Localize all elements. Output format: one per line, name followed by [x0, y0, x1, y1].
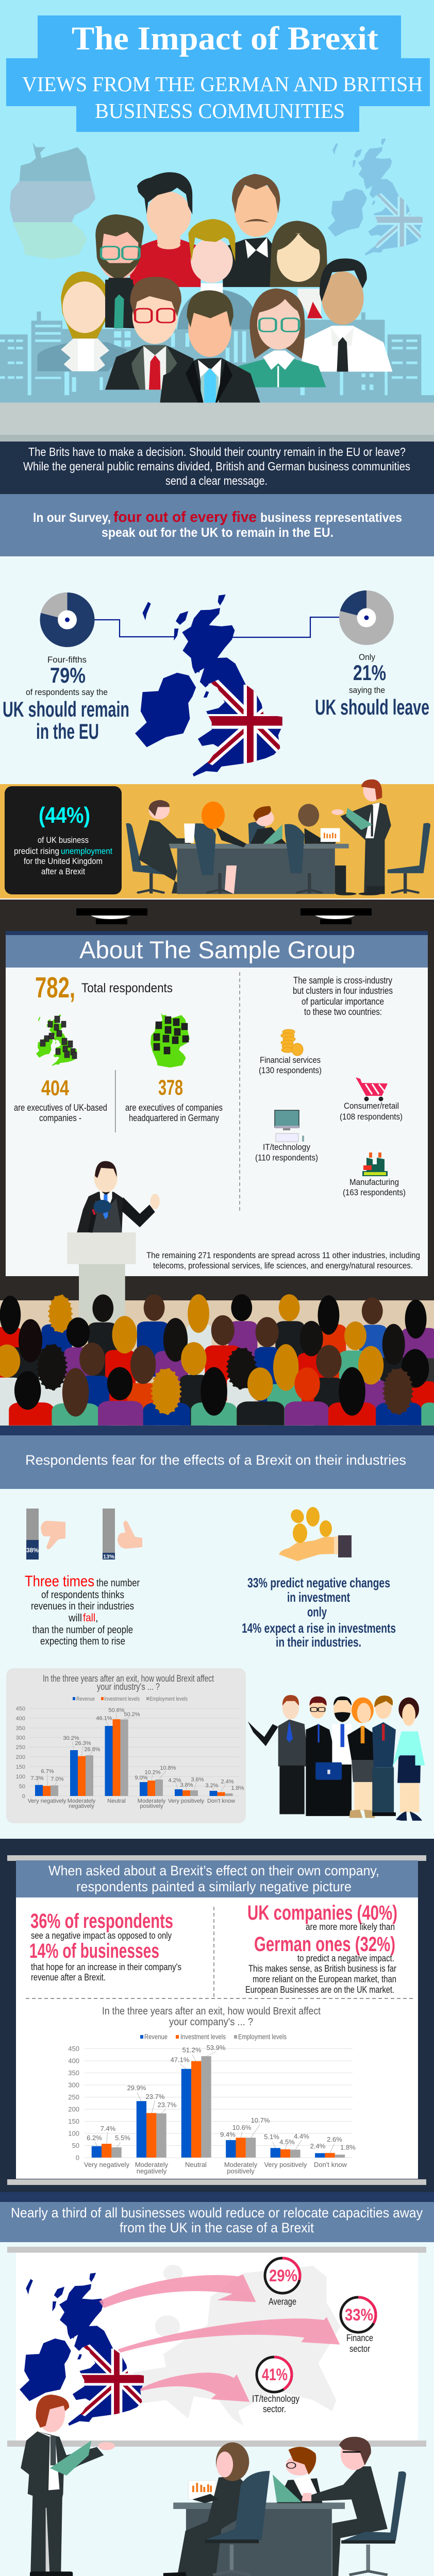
- total respondents: [35, 971, 173, 1004]
- connector lines from donuts to map: [67, 617, 366, 637]
- remaining respondents note: [146, 1250, 420, 1270]
- seated man curly hair: [273, 2447, 323, 2503]
- label: IT technology: (110 respondents): [255, 1153, 318, 1162]
- heading: nearly a third: from the UK in the case of a Brexit: [120, 2220, 314, 2235]
- callout: 44 percent unemployment: [5, 786, 122, 894]
- callout: 44 percent unemployment: unemployment: [61, 846, 112, 856]
- category labels: positively: [227, 2167, 255, 2175]
- data labels: 1.8%: [340, 2143, 356, 2151]
- icon: thumbs up: [118, 1521, 142, 1549]
- data labels: 4.5%: [279, 2138, 295, 2146]
- category labels: negatively: [69, 1803, 94, 1809]
- data labels: 46.1%: [96, 1716, 112, 1722]
- axis values: 100: [16, 1774, 25, 1780]
- axis values: 200: [68, 2105, 79, 2113]
- text: three times: revenues in their industries: [31, 1601, 134, 1612]
- seated woman orange hair: [202, 802, 246, 894]
- leave statistic text: Only: [359, 652, 375, 662]
- data labels: 3.6%: [191, 1776, 204, 1783]
- audience: [0, 1294, 434, 1426]
- chart title: [43, 1673, 214, 1692]
- Germany respondent count: headquartered in Germany: [129, 1113, 219, 1123]
- header illustration: maps, skyline and business people: [0, 140, 434, 402]
- ring: 33 percent finance: [341, 2297, 376, 2354]
- seated man left: [138, 800, 195, 893]
- bar: 13 percent revenue rise: 13%: [103, 1554, 114, 1560]
- bars: [35, 1726, 218, 1796]
- label: financial services: Financial services: [260, 1055, 321, 1065]
- data labels: 23.7%: [146, 2093, 165, 2100]
- data labels: 6.7%: [41, 1768, 54, 1774]
- callout: 44 percent unemployment: predict rising: [14, 846, 59, 856]
- remain statistic text: UK should remain: [3, 697, 129, 721]
- data labels: [30, 1707, 244, 1791]
- category labels: Moderately: [68, 1798, 96, 1804]
- data labels: 29.9%: [127, 2084, 146, 2092]
- person: centre front in dark suit with blue tie: [160, 290, 260, 402]
- leave statistic text: saying the: [349, 685, 385, 695]
- axis values: 450: [68, 2045, 79, 2053]
- industry intro text: The sample is cross-industry: [293, 975, 392, 986]
- axis values: 350: [68, 2069, 79, 2077]
- data labels: 50.2%: [124, 1711, 140, 1718]
- text: three times: fall: [83, 1612, 95, 1624]
- text: three times: Three times: [25, 1573, 94, 1590]
- ring: 29 percent average: 29%: [269, 2266, 297, 2285]
- chart title: [102, 2006, 321, 2028]
- data labels: [87, 2044, 356, 2151]
- text: three times: the number: [96, 1578, 140, 1589]
- ring: 41 percent IT: sector.: [263, 2404, 286, 2414]
- map: green Germany with buildings: [151, 1013, 190, 1067]
- chart legend: Employment levels: [149, 1696, 188, 1702]
- label: IT technology: IT/technology: [263, 1142, 310, 1152]
- label: consumer retail: [340, 1101, 403, 1122]
- chart title: In the three years after an exit, how would Brexit affect: [43, 1673, 214, 1684]
- person: red t-shirt: [130, 172, 201, 287]
- text: three times: expecting them to rise: [40, 1636, 125, 1647]
- data labels: 7.3%: [30, 1775, 44, 1782]
- data labels: 3.8%: [180, 1782, 193, 1788]
- illustration: group of business people: [248, 1695, 425, 1821]
- text: three times: will: [68, 1613, 82, 1624]
- label: consumer retail: Consumer/retail: [344, 1101, 399, 1111]
- remain statistic text: 79%: [50, 663, 86, 687]
- remain statistic text: in the EU: [36, 719, 99, 743]
- chart: effects on company: [68, 2006, 356, 2175]
- ring: 29 percent average: Average: [269, 2297, 296, 2307]
- UK respondent count: 404: [41, 1076, 69, 1100]
- axis values: 400: [16, 1716, 25, 1722]
- category labels: Moderately: [135, 2161, 169, 2168]
- category labels: Very positively: [168, 1798, 205, 1804]
- text: investment prediction: [242, 1575, 396, 1650]
- Germany respondent count: 378: [158, 1075, 183, 1099]
- map: United Kingdom with flag: [135, 595, 285, 776]
- icon: thumbs down: [41, 1521, 65, 1549]
- person: blonde woman with jacket: [37, 272, 127, 371]
- text: 36 and 14 percent: 14% of businesses: [29, 1940, 159, 1962]
- map: Germany faded: [10, 143, 95, 260]
- remain statistic text: Four-fifths: [47, 655, 87, 665]
- axis values: 0: [76, 2154, 79, 2162]
- speaker: [77, 1161, 160, 1232]
- axis values: 350: [16, 1725, 25, 1732]
- man with beard: [332, 1697, 352, 1816]
- person: white shirt with black tie: [302, 259, 392, 371]
- woman in cyan shirt: [392, 1698, 425, 1821]
- axis values: [68, 2045, 79, 2162]
- axis values: 150: [16, 1764, 25, 1770]
- axis values: 200: [16, 1754, 25, 1760]
- text: UK and German companies: European Businesses are on the UK market.: [245, 1985, 394, 1995]
- category labels: negatively: [137, 2167, 167, 2175]
- person: beard and green glasses: [95, 214, 144, 289]
- label: IT technology: [255, 1142, 318, 1162]
- axis values: [16, 1706, 25, 1800]
- data labels: 5.5%: [115, 2134, 130, 2142]
- icon: shopping cart: [356, 1077, 388, 1101]
- industry intro text: [293, 975, 393, 1017]
- heading: About The Sample Group: [79, 936, 355, 963]
- category labels: Neutral: [107, 1798, 126, 1804]
- person: long haired woman in red: [270, 221, 328, 319]
- data labels: 26.3%: [75, 1740, 91, 1747]
- UK respondent count: companies -: [39, 1113, 81, 1123]
- bar: 38 percent revenue fall: 38%: [26, 1547, 39, 1554]
- illustration: presenter and seated audience: [21, 2395, 406, 2576]
- heading: When asked about a Brexit’s effect on their own company,: [48, 1863, 379, 1878]
- Germany respondent count: [125, 1075, 223, 1123]
- ring: 41 percent IT: IT/technology: [252, 2394, 299, 2404]
- industry intro text: to these two countries:: [304, 1007, 382, 1017]
- title banner: [6, 15, 430, 132]
- bar: 38 percent revenue fall: [26, 1509, 39, 1560]
- data labels: 5.1%: [264, 2133, 279, 2141]
- category labels: Very positively: [264, 2161, 307, 2168]
- axis values: 50: [19, 1784, 25, 1790]
- label: manufacturing: (163 respondents): [343, 1188, 406, 1197]
- text: three times: [25, 1573, 140, 1647]
- text: UK and German companies: more reliant on the European market, than: [253, 1974, 396, 1985]
- data labels: 10.2%: [144, 1770, 161, 1776]
- chart title: your industry's ... ?: [97, 1682, 160, 1692]
- ring: 41 percent IT: [252, 2357, 299, 2414]
- icon: coins: [281, 1029, 303, 1056]
- data labels: 3.2%: [205, 1783, 219, 1789]
- ring: 33 percent finance: sector: [349, 2344, 370, 2354]
- chart legend: Employment levels: [238, 2032, 287, 2041]
- title banner: The Impact of Brexit: [72, 20, 378, 57]
- data labels: 47.1%: [171, 2056, 190, 2064]
- text: three times: than the number of people: [32, 1624, 133, 1636]
- category labels: Moderately: [138, 1798, 166, 1804]
- ring: 33 percent finance: Finance: [346, 2333, 373, 2343]
- axis values: 150: [68, 2117, 79, 2125]
- skyline: [0, 312, 434, 402]
- text: 36 and 14 percent: that hope for an increase in their company's: [31, 1962, 181, 1972]
- ring: 33 percent finance: 33%: [345, 2306, 373, 2324]
- text: investment prediction: only: [307, 1604, 327, 1620]
- callout: 44 percent unemployment: after a Brexit: [41, 867, 85, 876]
- category labels: Moderately: [224, 2161, 258, 2168]
- category labels: Very negatively: [28, 1798, 66, 1804]
- seated chair right: [341, 2471, 406, 2575]
- standing presenter: [331, 779, 391, 894]
- person: red glasses and grey suit: [105, 277, 194, 389]
- label: financial services: [259, 1055, 322, 1075]
- UK respondent count: are executives of UK-based: [14, 1103, 107, 1113]
- category labels: Very negatively: [84, 2161, 130, 2168]
- seated man brown hair: [163, 2443, 266, 2576]
- seated chair front: [205, 2471, 270, 2575]
- survey headline band: In our Survey,: [33, 511, 111, 525]
- axis values: 400: [68, 2057, 79, 2065]
- icon: hand with coins: [279, 1507, 352, 1561]
- title banner: BUSINESS COMMUNITIES: [95, 99, 345, 123]
- text: 36 and 14 percent: revenue after a Brexit.: [31, 1972, 106, 1982]
- survey headline band: four out of every five: [113, 509, 257, 526]
- label: financial services: (130 respondents): [259, 1065, 322, 1075]
- survey headline band: business representatives: [260, 511, 402, 525]
- chart legend: Revenue: [76, 1696, 95, 1702]
- axis values: 250: [68, 2093, 79, 2101]
- map: green UK with buildings: [36, 1014, 77, 1066]
- text: investment prediction: 33% predict negative changes: [247, 1575, 390, 1590]
- chart title: In the three years after an exit, how would Brexit affect: [102, 2006, 321, 2017]
- category labels: [28, 1798, 235, 1809]
- panel: relocation board: [7, 2247, 426, 2447]
- table: [173, 2502, 345, 2576]
- Germany respondent count: are executives of companies: [125, 1103, 223, 1113]
- intro text band: send a clear message.: [165, 474, 268, 487]
- heading: nearly a third: [11, 2205, 423, 2235]
- remain statistic text: [3, 655, 129, 743]
- axis values: 250: [16, 1744, 25, 1751]
- data labels: 4.4%: [294, 2132, 309, 2140]
- man in grey suit: [248, 1695, 309, 1814]
- woman with orange hair: [347, 1698, 385, 1818]
- data labels: 10.8%: [160, 1765, 176, 1771]
- person: green tie behind: [105, 280, 136, 328]
- illustration: boardroom meeting: [126, 779, 430, 895]
- text: UK and German companies: to predict a negative impact.: [297, 1953, 394, 1963]
- industry intro text: but clusters in four industries: [293, 986, 393, 996]
- data labels: 50.6%: [108, 1707, 125, 1714]
- UK respondent count: [14, 1076, 107, 1123]
- label: manufacturing: [343, 1177, 406, 1197]
- legs and shoes: [335, 866, 385, 895]
- data labels: 2.4%: [310, 2142, 326, 2150]
- man in navy suit: [372, 1696, 396, 1816]
- data labels: 10.7%: [251, 2116, 270, 2124]
- text: UK and German companies: This makes sense, as British business is far: [248, 1963, 396, 1974]
- category labels: Don't know: [207, 1798, 235, 1804]
- label: manufacturing: Manufacturing: [349, 1177, 399, 1187]
- survey headline band: speak out for the UK to remain in the EU.: [102, 526, 333, 540]
- panel: about the sample group: [6, 931, 428, 1276]
- remain statistic text: of respondents say the: [26, 687, 108, 697]
- leave statistic text: [315, 652, 429, 719]
- chairs: [126, 822, 430, 875]
- seated man right: [302, 2437, 388, 2576]
- category labels: Neutral: [185, 2161, 207, 2168]
- table: [163, 844, 349, 894]
- label: consumer retail: (108 respondents): [340, 1112, 403, 1122]
- data labels: 7.4%: [101, 2125, 116, 2132]
- heading: respondents fear: Respondents fear for the effects of a Brexit on their industries: [25, 1452, 406, 1468]
- person: woman with green top: [238, 289, 326, 387]
- survey headline band: [33, 509, 402, 540]
- axis values: 450: [16, 1706, 25, 1712]
- data labels: 10.6%: [232, 2124, 252, 2131]
- data labels: 9.0%: [135, 1775, 148, 1781]
- chart legend: [140, 2032, 287, 2041]
- chart: effects on industry: [6, 1668, 246, 1823]
- axis values: 300: [16, 1735, 25, 1741]
- text: investment prediction: in their industries.: [276, 1634, 361, 1650]
- chart title: your company's ... ?: [169, 2016, 253, 2028]
- person: blonde man behind: [177, 219, 256, 329]
- axis values: 0: [22, 1793, 25, 1800]
- heading: respondents painted a similarly negative picture: [76, 1879, 352, 1894]
- chart legend: Revenue: [144, 2032, 168, 2041]
- total respondents: 782,: [35, 971, 75, 1004]
- presenter: [21, 2395, 115, 2576]
- text: 36 and 14 percent: 36% of respondents: [30, 1910, 173, 1933]
- panel: effect on own company: [7, 1855, 426, 2185]
- data labels: 6.2%: [87, 2134, 102, 2142]
- data labels: 26.8%: [84, 1747, 101, 1753]
- axis values: 300: [68, 2081, 79, 2089]
- data labels: 51.2%: [182, 2046, 202, 2054]
- bars: [92, 2052, 345, 2158]
- data labels: 4.2%: [168, 1777, 181, 1784]
- text: 36 and 14 percent: see a negative impact as opposed to only: [31, 1930, 172, 1941]
- callout: 44 percent unemployment: of UK business: [38, 835, 89, 845]
- chart legend: Investment levels: [104, 1696, 140, 1702]
- category labels: Don't know: [314, 2161, 347, 2168]
- man with glasses: [306, 1697, 338, 1816]
- text: three times: ,: [95, 1613, 98, 1624]
- ring: 41 percent IT: 41%: [262, 2365, 288, 2384]
- callout: 44 percent unemployment: (44%): [39, 803, 90, 828]
- data labels: 53.9%: [207, 2044, 226, 2052]
- seated man curly hair: [251, 806, 287, 844]
- leave statistic text: 21%: [353, 660, 386, 685]
- arrows: [99, 2275, 340, 2402]
- podium: [67, 1232, 136, 1323]
- category labels: positively: [140, 1803, 163, 1809]
- axis values: 50: [72, 2142, 79, 2149]
- icon: computer: [275, 1110, 304, 1142]
- text: UK and German companies: [245, 1902, 397, 1995]
- callout: 44 percent unemployment: for the United Kingdom: [24, 856, 103, 866]
- data labels: 30.2%: [63, 1735, 79, 1741]
- intro text band: [23, 445, 410, 487]
- map: faded Europe: [133, 2265, 341, 2426]
- ring: 29 percent average: [265, 2258, 300, 2307]
- text: investment prediction: in investment: [287, 1589, 350, 1605]
- icon: factory: [362, 1153, 388, 1176]
- text: UK and German companies: are more more likely than: [306, 1922, 395, 1932]
- map: United Kingdom with flag: [20, 2273, 146, 2426]
- donut: 21 percent leave: [339, 590, 394, 645]
- laptop: [188, 2481, 216, 2499]
- data labels: 7.0%: [51, 1776, 64, 1783]
- title banner: VIEWS FROM THE GERMAN AND BRITISH: [22, 72, 423, 96]
- chart legend: [73, 1696, 188, 1702]
- chart legend: Investment levels: [180, 2032, 226, 2041]
- map: United Kingdom faded in header: [328, 138, 424, 256]
- bar: 13 percent revenue rise: [103, 1509, 115, 1560]
- ceiling lights: [76, 908, 372, 924]
- text: three times: of respondents thinks: [41, 1589, 124, 1601]
- data labels: 9.4%: [220, 2131, 236, 2138]
- category labels: [84, 2161, 347, 2175]
- data labels: 2.4%: [221, 1778, 234, 1785]
- heading: [48, 1863, 379, 1894]
- illustration: speaker at podium and audience: [0, 1161, 434, 1426]
- donut: 79 percent remain: [40, 592, 95, 647]
- total respondents: Total respondents: [81, 981, 173, 995]
- axis values: 100: [68, 2130, 79, 2137]
- text: 36 and 14 percent: [29, 1910, 181, 1982]
- data labels: 2.6%: [327, 2136, 342, 2143]
- seated man brown hair with laptop: [298, 804, 340, 844]
- data labels: 23.7%: [158, 2101, 177, 2109]
- person: moustache and black suit: [223, 174, 280, 287]
- data labels: 1.8%: [231, 1785, 244, 1791]
- industry intro text: of particular importance: [302, 996, 384, 1007]
- briefcase: [315, 1762, 342, 1780]
